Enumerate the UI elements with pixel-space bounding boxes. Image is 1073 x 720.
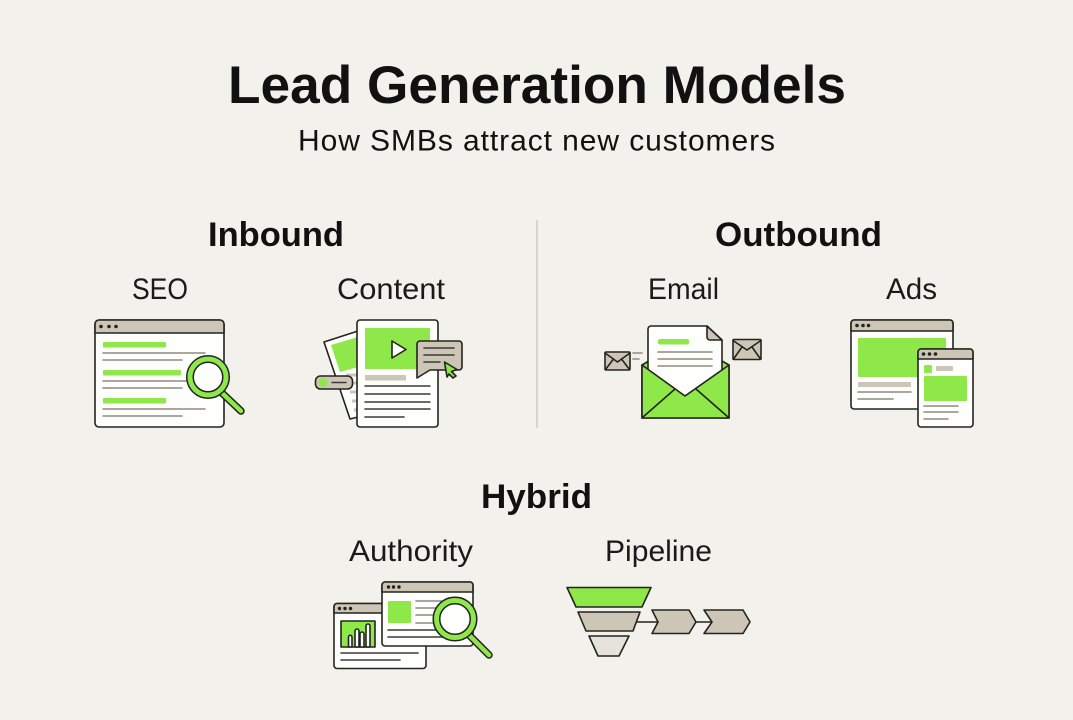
label: Content: Content <box>337 273 445 306</box>
icon: content pages with video and chat <box>316 320 462 427</box>
label: Authority: Authority <box>349 535 473 568</box>
heading: Outbound: Outbound <box>715 216 882 254</box>
icon: SEO browser with magnifier <box>95 320 241 427</box>
label: SEO: SEO <box>132 273 188 306</box>
subtitle: How SMBs attract new customers <box>298 124 775 158</box>
label: Email: Email <box>648 273 719 306</box>
icon: funnel with pipeline stages <box>567 588 750 656</box>
label: Pipeline: Pipeline <box>605 535 712 568</box>
icon: authority windows with chart and magnifier <box>334 582 489 668</box>
heading: Inbound: Inbound <box>208 216 344 254</box>
heading: Hybrid: Hybrid <box>481 478 592 516</box>
icon: email envelope with letter <box>605 326 761 418</box>
title: Lead Generation Models <box>228 56 846 115</box>
icon: ad banners in desktop and mobile windows <box>851 320 973 427</box>
label: Ads: Ads <box>886 273 937 306</box>
